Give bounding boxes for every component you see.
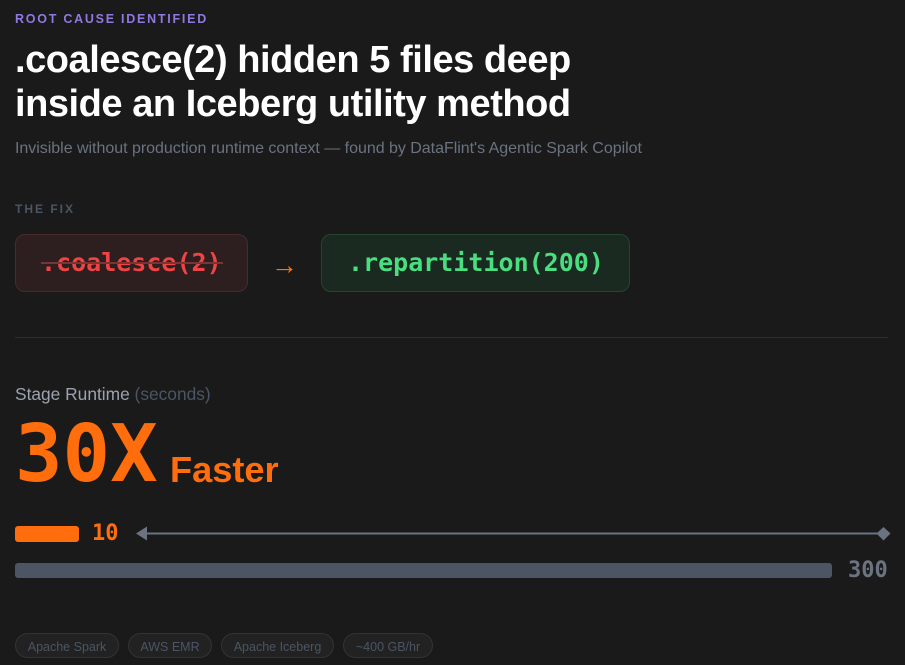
double-ended range arrow xyxy=(136,526,890,540)
tag: iceberg xyxy=(221,633,334,658)
after code: .repartition(200) xyxy=(348,248,604,277)
eyebrow label: ROOT CAUSE IDENTIFIED xyxy=(15,12,208,26)
grey bar xyxy=(15,563,832,578)
arrow: → xyxy=(271,250,298,280)
tag: volume xyxy=(343,633,433,658)
title: .coalesce(2) hidden 5 files deep xyxy=(15,39,571,81)
tag: volume: ~400 GB/hr xyxy=(356,640,420,654)
strikethrough xyxy=(41,262,223,264)
orange bar xyxy=(15,526,79,542)
subtitle: Invisible without production runtime context — found by DataFlint's Agentic Spark Copilot xyxy=(15,140,642,157)
tag: iceberg: Apache Iceberg xyxy=(234,640,321,654)
before code box xyxy=(15,234,248,292)
before code: .coalesce(2) xyxy=(41,248,222,277)
30X number: 30X xyxy=(15,408,158,500)
big stat xyxy=(15,408,279,500)
tag: emr xyxy=(128,633,212,658)
divider xyxy=(15,337,888,338)
title xyxy=(15,39,571,125)
tag: emr: AWS EMR xyxy=(140,640,200,654)
tag: spark: Apache Spark xyxy=(28,640,106,654)
after code box xyxy=(321,234,630,292)
faster label: Faster xyxy=(170,449,279,490)
value 300: 300 xyxy=(848,558,888,583)
chart heading: Stage Runtime (seconds) xyxy=(15,384,211,404)
title: inside an Iceberg utility method xyxy=(15,83,571,125)
tag: spark xyxy=(15,633,119,658)
value 10: 10 xyxy=(92,521,118,546)
fix label: THE FIX xyxy=(15,202,75,216)
tags row xyxy=(15,633,433,658)
